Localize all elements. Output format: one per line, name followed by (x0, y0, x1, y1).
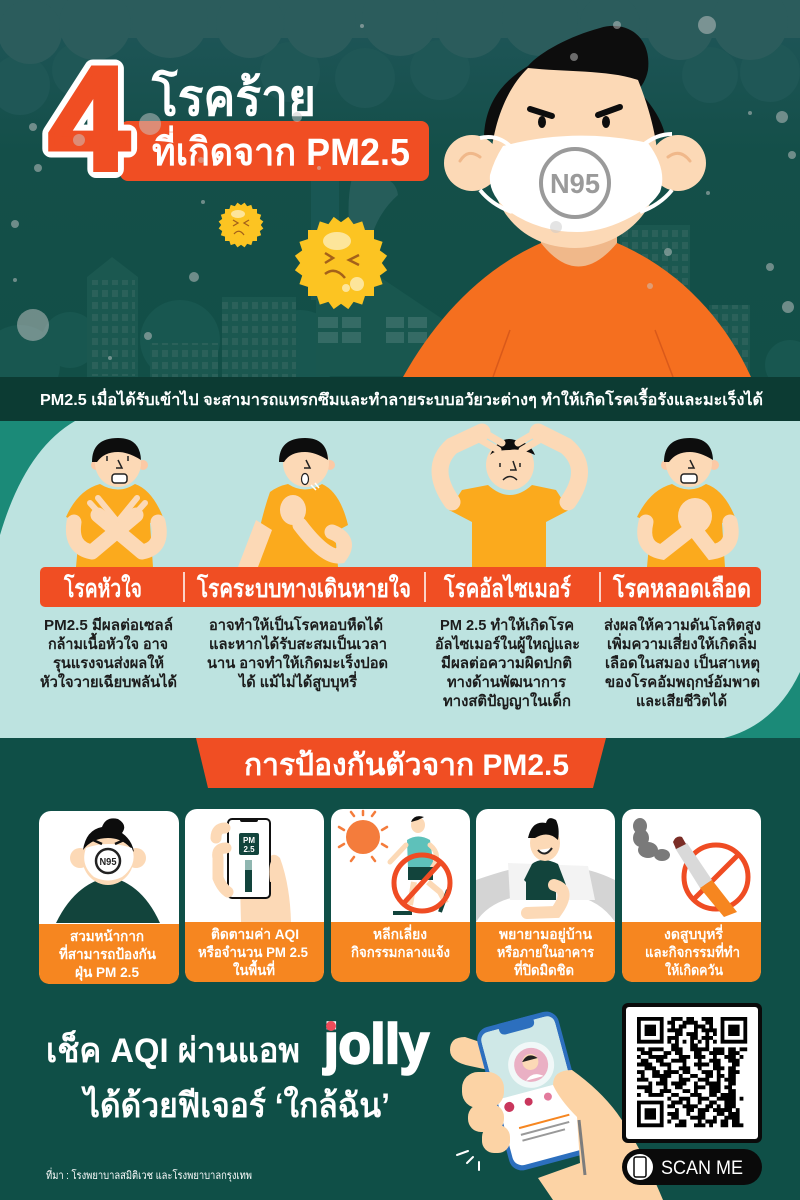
figure: heart disease, hands crossed on chest (66, 438, 163, 567)
call to action text (46, 1029, 390, 1125)
heading bar: disease names: โรคระบบทางเดินหายใจ (196, 573, 411, 603)
panel: smoggy city hero background (0, 0, 800, 405)
panel: four diseases background (0, 421, 800, 738)
text: heart disease description: กล้ามเนื้อหัวใจ อาจ (48, 632, 168, 653)
text: vascular disease description (604, 615, 761, 710)
text: vascular disease description: ของโรคอัมพฤกษ์อัมพาต (605, 672, 760, 691)
card: avoid outdoor activity: หลีกเลี่ยง (373, 924, 427, 942)
heading bar: disease names: โรคหัวใจ (63, 573, 142, 603)
panel: prevention section background (0, 738, 800, 1200)
heading: prevention banner: การป้องกันตัวจาก PM2.5 (244, 749, 569, 782)
card: quit smoking: และกิจกรรมที่ทำ (645, 942, 740, 960)
scan me badge: SCAN ME (661, 1158, 743, 1179)
title: ที่เกิดจาก PM2.5 (152, 125, 410, 174)
call to action text: ได้ด้วยฟีเจอร์ ‘ใกล้ฉัน’ (81, 1085, 390, 1125)
text: respiratory disease description: และหากได้รับสะสมเป็นเวลา (209, 634, 387, 653)
title: 4 (49, 37, 129, 200)
icon: large angry PM2.5 dust particle (295, 217, 387, 309)
text: respiratory disease description: นาน อาจทำให้เกิดมะเร็งปอด (207, 653, 388, 672)
card: wear a mask (39, 811, 179, 984)
QR code (622, 1003, 762, 1143)
figure: vascular disease, fist on chest (637, 438, 735, 567)
logo: jolly: jolly (323, 1012, 429, 1075)
title: โรคร้าย (151, 68, 316, 126)
card: quit smoking (622, 809, 761, 982)
card: stay indoors (476, 809, 615, 982)
text: heart disease description (40, 616, 177, 691)
illustration: man wearing N95 mask (403, 26, 751, 377)
card: quit smoking: งดสูบบุหรี่ (664, 924, 723, 943)
illustration: hand holding phone (450, 1009, 663, 1200)
text: vascular disease description: เลือดในสมอง เป็นสาเหตุ (605, 653, 760, 673)
card: wear a mask: สวมหน้ากาก (70, 928, 144, 944)
card: monitor AQI: 2.5 (243, 845, 255, 854)
icon: small angry PM2.5 dust particle (219, 203, 263, 247)
text: heart disease description: รุนแรงจนส่งผลให้ (53, 654, 164, 673)
figure: Alzheimer's, hands on head (440, 430, 580, 567)
card: wear a mask: ฝุ่น PM 2.5 (75, 964, 139, 981)
card: avoid outdoor activity (331, 809, 470, 982)
card: monitor AQI: ติดตามค่า AQI (211, 926, 299, 942)
card: stay indoors: พยายามอยู่บ้าน (499, 926, 592, 943)
intro band: PM2.5 เมื่อได้รับเข้าไป จะสามารถแทรกซึมและทำลายระบบอวัยวะต่างๆ ทำให้เกิดโรคเรื้อรังและมะเร็งได้ (40, 387, 763, 409)
text: Alzheimer's description: ทางสติปัญญาในเด็ก (443, 691, 571, 710)
text: Alzheimer's description: อัลไซเมอร์ในผู้ใหญ่และ (435, 634, 580, 654)
card: avoid outdoor activity: กิจกรรมกลางแจ้ง (351, 944, 450, 960)
text: heart disease description: หัวใจวายเฉียบพลันได้ (40, 672, 177, 691)
title (49, 37, 429, 200)
text: Alzheimer's description: PM 2.5 ทำให้เกิดโรค (440, 615, 574, 634)
heading bar: disease names: โรคอัลไซเมอร์ (443, 573, 571, 603)
source note: ที่มา : โรงพยาบาลสมิติเวช และโรงพยาบาลกรุงเทพ (46, 1167, 252, 1182)
text: Alzheimer's description: มีผลต่อความผิดปกติ (441, 654, 572, 672)
card: monitor AQI: หรือจำนวน PM 2.5 (198, 944, 308, 960)
call to action text: เช็ค AQI ผ่านแอพ (46, 1029, 300, 1070)
card: stay indoors: ที่ปิดมิดชิด (514, 960, 574, 978)
text: Alzheimer's description: ทางด้านพัฒนาการ (447, 674, 567, 691)
card: monitor AQI (185, 809, 324, 982)
text: respiratory disease description (207, 615, 388, 692)
figure: respiratory disease, coughing (238, 438, 348, 567)
card: quit smoking: ให้เกิดควัน (665, 961, 723, 978)
intro band (0, 377, 800, 421)
card: monitor AQI: PM (243, 836, 255, 845)
text: vascular disease description: ส่งผลให้ความดันโลหิตสูง (604, 615, 761, 635)
text: Alzheimer's description (435, 615, 580, 710)
card: wear a mask: ที่สามารถป้องกัน (59, 944, 156, 962)
text: vascular disease description: เพิ่มความเสี่ยงให้เกิดลิ่ม (607, 633, 757, 653)
card: monitor AQI: ในพื้นที่ (233, 959, 275, 978)
floating dust particles (11, 16, 796, 360)
title: 4 (49, 37, 129, 200)
text: respiratory disease description: ได้ แม้ไม่ได้สูบบุหรี่ (237, 671, 358, 692)
scan me badge (622, 1149, 762, 1185)
text: vascular disease description: และเสียชีวิตได้ (636, 691, 727, 710)
heading bar: disease names (40, 567, 761, 607)
illustration: man wearing N95 mask: N95 (550, 168, 600, 199)
heading bar: disease names: โรคหลอดเลือด (612, 573, 751, 603)
card: wear a mask: N95 (100, 857, 117, 868)
text: heart disease description: PM2.5 มีผลต่อเซลล์ (44, 616, 173, 634)
card: stay indoors: หรือภายในอาคาร (497, 943, 594, 960)
heading: prevention banner (196, 738, 606, 788)
text: respiratory disease description: อาจทำให้เป็นโรคหอบหืดได้ (209, 615, 383, 634)
